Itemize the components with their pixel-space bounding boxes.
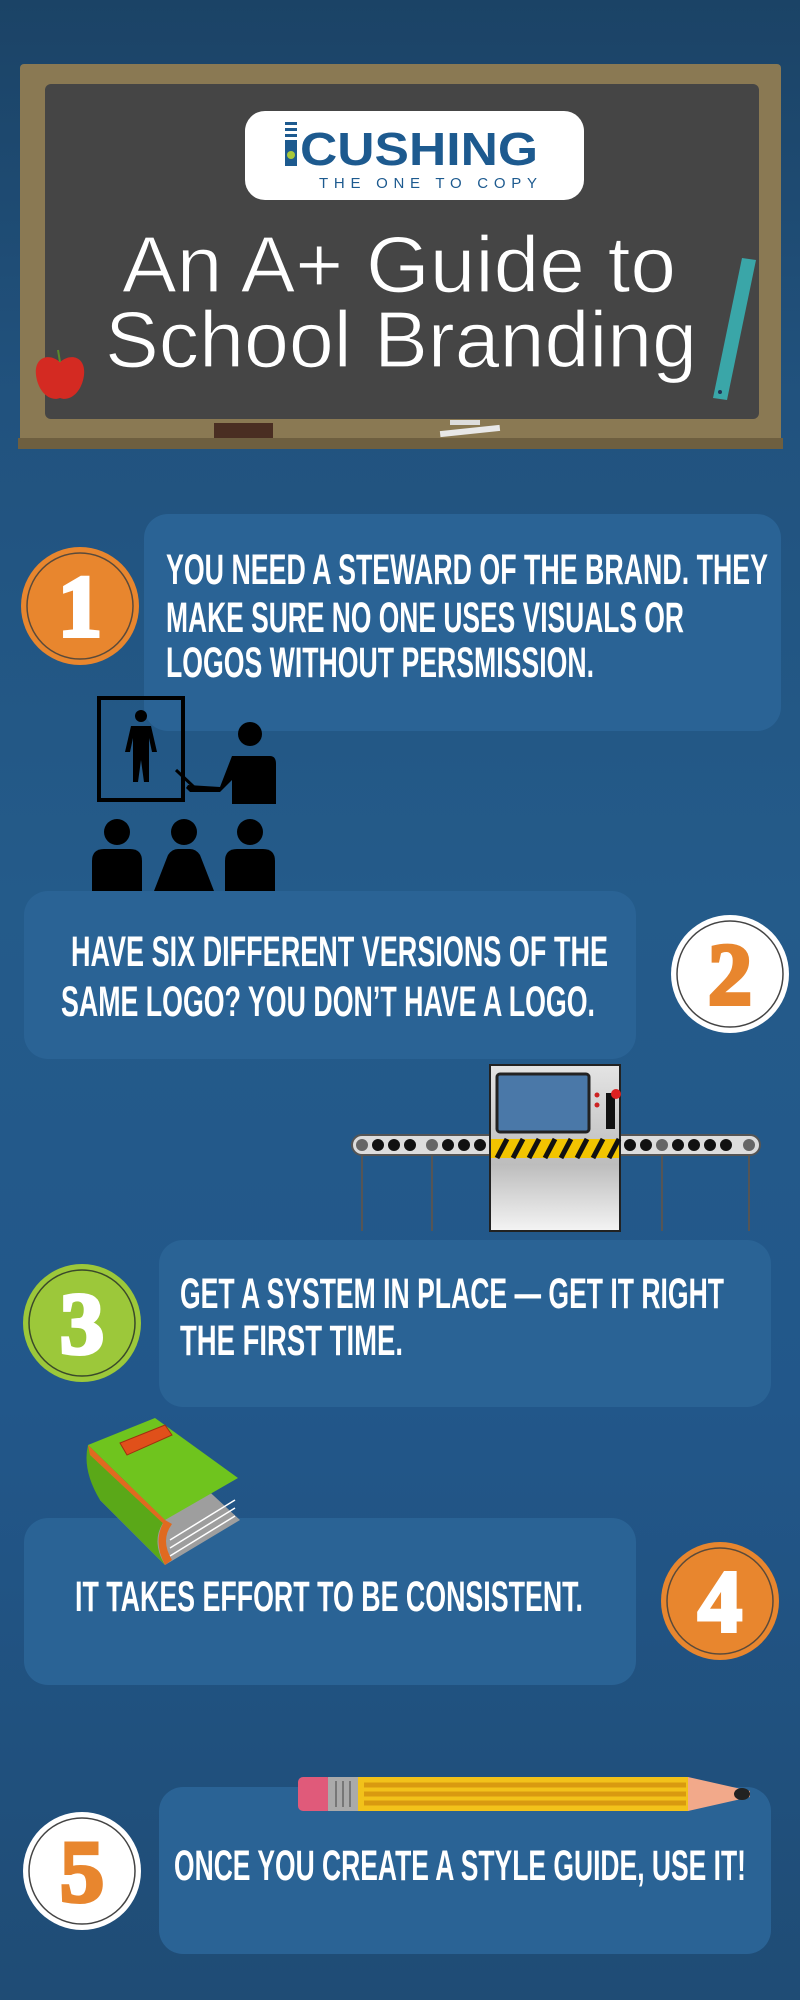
text box 5: [159, 1787, 771, 1954]
text box 1: [144, 514, 781, 731]
chalkboard header: [18, 64, 783, 449]
text box 3: THE FIRST TIME.: [180, 1317, 403, 1365]
panel: step 5: [23, 1777, 771, 1954]
text box 3: [159, 1240, 771, 1407]
logo box: [245, 111, 584, 200]
frame: [18, 64, 783, 449]
panel: step 4: [24, 1518, 779, 1685]
chalk: [440, 420, 500, 437]
badge 5: 5: [60, 1824, 104, 1921]
text box 4: [24, 1518, 636, 1685]
logo box: THE ONE TO COPY: [319, 175, 537, 192]
title: An A+ Guide to: [122, 220, 676, 309]
title: [105, 220, 697, 384]
icon: pencil: [298, 1777, 750, 1811]
panel: step 2: [24, 891, 789, 1059]
eraser: [214, 423, 273, 438]
badge 1: 1: [58, 559, 102, 656]
badge 1: [21, 547, 139, 665]
title: School Branding: [105, 295, 697, 384]
badge 4: [661, 1542, 779, 1660]
logo box: CUSHING: [300, 123, 538, 175]
icon: book: [86, 1418, 240, 1565]
icon: conveyor machine: [351, 1064, 761, 1232]
board: [45, 84, 759, 419]
icon: apple: [36, 350, 84, 399]
badge 2: [671, 915, 789, 1033]
panel: step 3: [23, 1240, 771, 1407]
badge 3: [23, 1264, 141, 1382]
icon: ruler: [713, 258, 756, 400]
text box 2: [24, 891, 636, 1059]
icon: teacher presenting: [92, 696, 276, 891]
badge 5: [23, 1812, 141, 1930]
panel: step 1: [21, 514, 781, 731]
badge 4: 4: [698, 1554, 742, 1651]
badge 3: 3: [60, 1276, 104, 1373]
badge 2: 2: [708, 927, 752, 1024]
